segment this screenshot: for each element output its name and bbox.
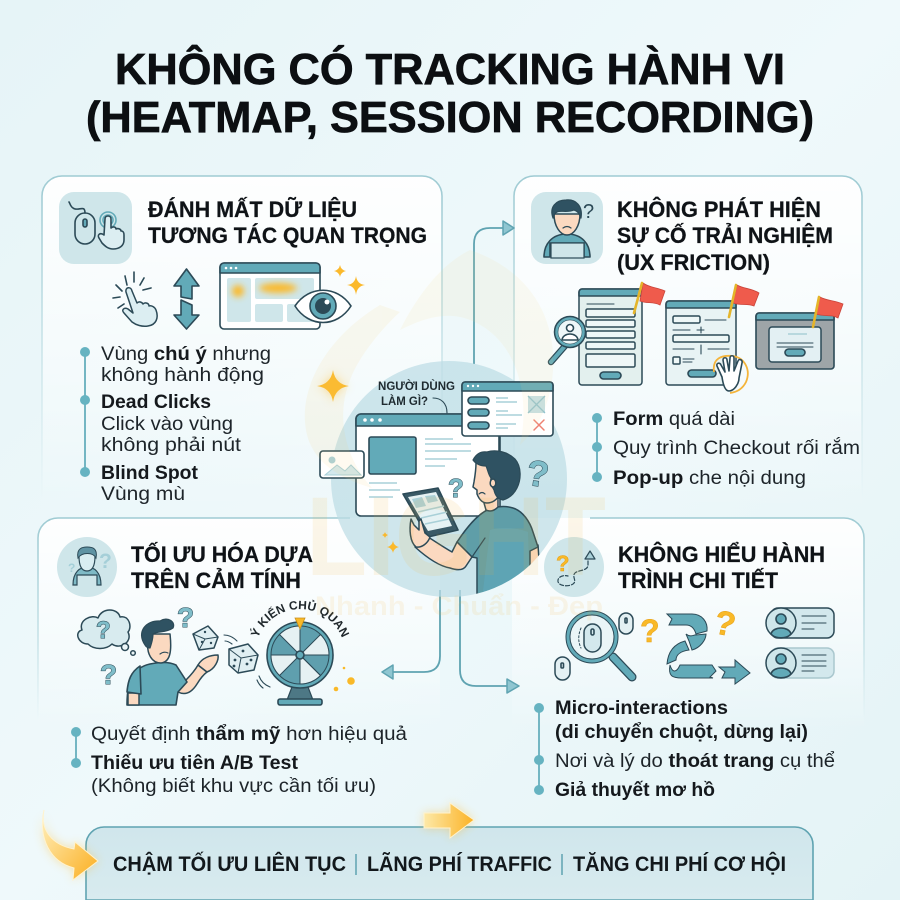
heading: SỰ CỐ TRẢI NGHIỆM [617,222,833,248]
connector arrow: to gut feeling [382,590,440,679]
icon: guessing user: ? [68,561,75,575]
hand [410,519,430,547]
bullet list [534,698,835,801]
icon: confused user: ? [583,201,594,223]
bullet list: Quyết định thẩm mỹ hơn hiệu quả [91,724,407,745]
heading [131,541,313,593]
icon: guessing user: ? [99,550,112,573]
question label [378,380,455,413]
arrow: gold curved [42,810,98,880]
title: (HEATMAP, SESSION RECORDING) [86,93,814,142]
bullet list: (di chuyển chuột, dừng lại) [555,722,808,743]
title [86,43,814,142]
bullet list [71,724,407,797]
bullet list: Form quá dài [613,409,735,430]
panel: lost interaction data [42,176,442,510]
heading [617,197,833,275]
heading: KHÔNG PHÁT HIỆN [617,197,821,222]
arrow: gold straight [424,803,474,838]
icon: journey tile [544,537,604,597]
hair [473,451,520,500]
heading: KHÔNG HIỂU HÀNH [618,542,825,567]
footer panel [86,827,813,900]
question marks: ? [100,659,117,690]
gold question marks: ? [711,603,739,645]
question label: NGƯỜI DÙNG [378,380,455,393]
main browser window [356,414,500,516]
bullet list: Vùng chú ý nhưng [101,344,271,365]
watermark logo [305,250,553,488]
footer panel: LÃNG PHÍ TRAFFIC [367,853,552,876]
heading: TƯƠNG TÁC QUAN TRỌNG [148,223,427,248]
icon: journey tile: ? [556,551,569,576]
question marks: ? [177,602,194,633]
question marks: ? [524,452,552,495]
icon: confused user [531,192,603,264]
bullet list: Giả thuyết mơ hồ [555,780,715,801]
heading [148,197,427,248]
title: KHÔNG CÓ TRACKING HÀNH VI [115,43,785,94]
checkout form with hand [666,285,759,393]
footer panel: TĂNG CHI PHÍ CƠ HỘI [573,852,786,876]
popup window with flag [756,297,843,369]
connector arrow: to journey [460,590,519,693]
icon: tiny sparkles [382,532,399,553]
bullet list: không phải nút [101,435,242,456]
forearm [415,537,472,570]
question marks [100,602,194,690]
magnifier with mice [555,613,633,680]
tablet [403,488,458,537]
bullet list [592,409,860,489]
heatmap browser with eye [220,263,351,329]
thought cloud: ? [96,617,111,644]
bullet list: Dead Clicks [101,392,211,413]
panel: journey not understood [512,518,864,801]
icon: guessing user [57,537,117,597]
bullet list: không hành động [101,365,264,386]
bullet list: Blind Spot [101,463,199,484]
watermark text: LIGHT [306,474,606,599]
connector arrow: to UX friction [474,221,514,364]
icon: tapping hand [113,272,157,326]
small popup window [462,382,553,452]
bullet list: Quy trình Checkout rối rắm [613,437,860,459]
icon: sparkles [334,265,365,295]
icon: vertical arrows [174,269,199,329]
person shrugging [127,619,218,705]
image card [320,451,364,478]
heading: ĐÁNH MẤT DỮ LIỆU [148,197,357,222]
heading: TỐI ƯU HÓA DỰA [131,541,313,567]
neck and face [484,495,498,511]
question label: LÀM GÌ? [381,395,428,408]
heading: (UX FRICTION) [617,250,770,275]
spinning wheel: Ý KIẾN CHỦ QUAN [250,600,350,638]
bullet list: (Không biết khu vực cần tối ưu) [91,776,376,797]
icon: mouse and touch [59,192,132,264]
heading: TRÊN CẢM TÍNH [131,568,301,593]
bullet list: Micro-interactions [555,698,728,719]
long form with flag [579,283,665,385]
shirt and body [457,506,539,600]
person with tablet [403,451,539,600]
central illustration [320,361,567,600]
thought cloud [78,610,135,655]
gold question marks: ? [640,613,660,649]
heading: TRÌNH CHI TIẾT [618,568,779,593]
bullet list: Pop-up che nội dung [613,468,806,489]
panel: optimisation by gut feeling [37,517,439,797]
bullet list: Thiếu ưu tiên A/B Test [91,753,299,774]
question marks: ? [448,473,464,503]
dice [193,626,270,688]
gold question marks [640,603,739,649]
spinning wheel [250,600,355,706]
icon: large gold star [317,370,349,402]
footer panel: CHẬM TỐI ƯU LIÊN TỤC [113,852,346,876]
broken journey arrow [667,614,750,684]
watermark text: Nhanh - Chuẩn - Đẹp [315,591,603,621]
magnifier with user [551,318,584,362]
bullet list: Click vào vùng [101,414,233,435]
heading [618,542,825,593]
question marks [448,452,552,503]
bullet list: Vùng mù [101,484,185,505]
panel: UX friction [514,176,862,510]
user cards [766,608,834,678]
bullet list: Nơi và lý do thoát trang cụ thể [555,751,835,772]
bullet list [80,344,271,505]
